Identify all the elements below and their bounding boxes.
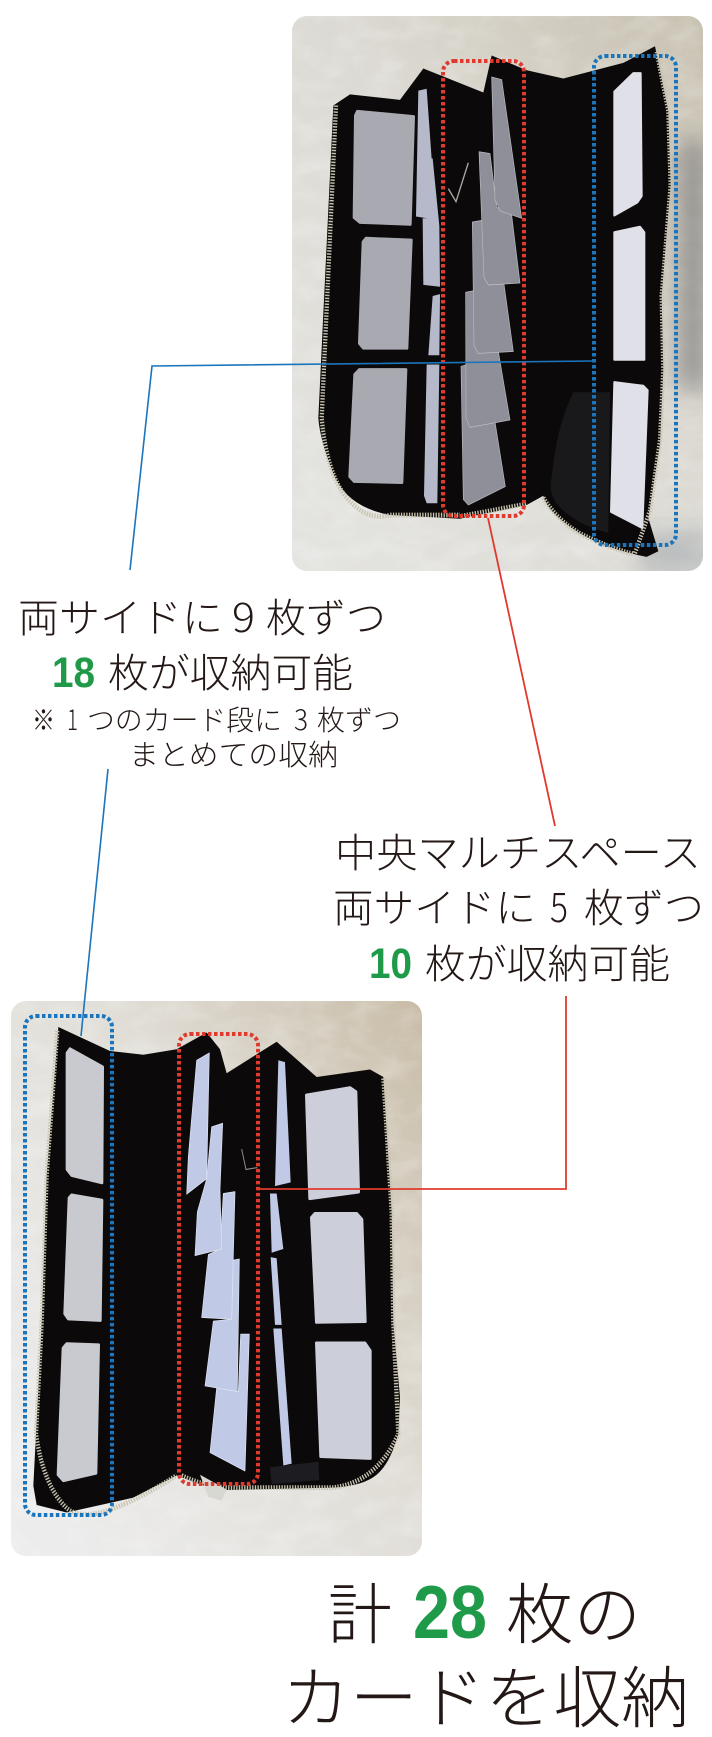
left cards	[350, 111, 414, 482]
leader line: red to top photo	[488, 518, 555, 826]
note: つのカード段に	[87, 699, 282, 739]
line: 18 cards: 枚が収納可能	[108, 641, 353, 699]
callout box: bottom center space	[179, 1034, 258, 1484]
zipper	[36, 1031, 398, 1514]
text: side cards	[18, 586, 401, 774]
line: both sides five each: 5	[550, 876, 568, 934]
text: center space	[333, 821, 704, 990]
line: both sides nine each: 両サイドに	[18, 586, 223, 644]
photo: wallet bottom view with left side cards	[11, 1001, 422, 1556]
line: both sides five each: 枚ずつ	[584, 876, 704, 934]
callout box: top center space	[443, 61, 524, 516]
line: both sides nine each: 9	[232, 586, 255, 644]
leader line: blue to top photo	[130, 361, 593, 570]
fold	[242, 1149, 257, 1169]
right inner cards	[270, 1060, 292, 1465]
note second line: まとめての収納	[129, 732, 338, 774]
glossy flap	[270, 1462, 319, 1484]
clasp	[200, 1475, 227, 1501]
wallet body	[33, 1027, 400, 1512]
line: both sides five each: 両サイドに	[333, 876, 536, 934]
wallet inner flap	[551, 392, 610, 533]
left cards	[58, 1049, 103, 1481]
text: total 28 cards	[282, 1562, 689, 1737]
left inner cards	[416, 89, 440, 503]
note: 枚ずつ	[317, 699, 401, 739]
center cards	[187, 1053, 249, 1471]
leader line: blue to bottom photo	[81, 769, 108, 1036]
line: total: 28	[413, 1570, 487, 1654]
line: total: 枚の	[506, 1562, 641, 1658]
photo: wallet top view with right side cards	[292, 16, 710, 575]
right cards	[306, 1088, 370, 1458]
line: both sides nine each: 枚ずつ	[266, 586, 386, 644]
callout box: top side cards	[594, 56, 676, 545]
note: 3	[294, 699, 308, 739]
line: total: 計	[328, 1562, 392, 1658]
line: 10 cards: 10	[369, 940, 412, 988]
note: 1	[67, 699, 78, 739]
leader line: red to bottom photo	[260, 996, 566, 1189]
line: 10 cards: 枚が収納可能	[425, 932, 670, 990]
line: 18 cards: 18	[52, 649, 95, 697]
right cards	[611, 73, 648, 528]
line: center multi space: 中央マルチスペース	[335, 821, 701, 879]
center cards	[461, 77, 522, 505]
callout box: bottom side cards	[25, 1016, 112, 1515]
note: ※	[32, 699, 55, 739]
fold	[448, 163, 468, 202]
wallet body	[318, 46, 671, 557]
zipper	[322, 52, 671, 554]
